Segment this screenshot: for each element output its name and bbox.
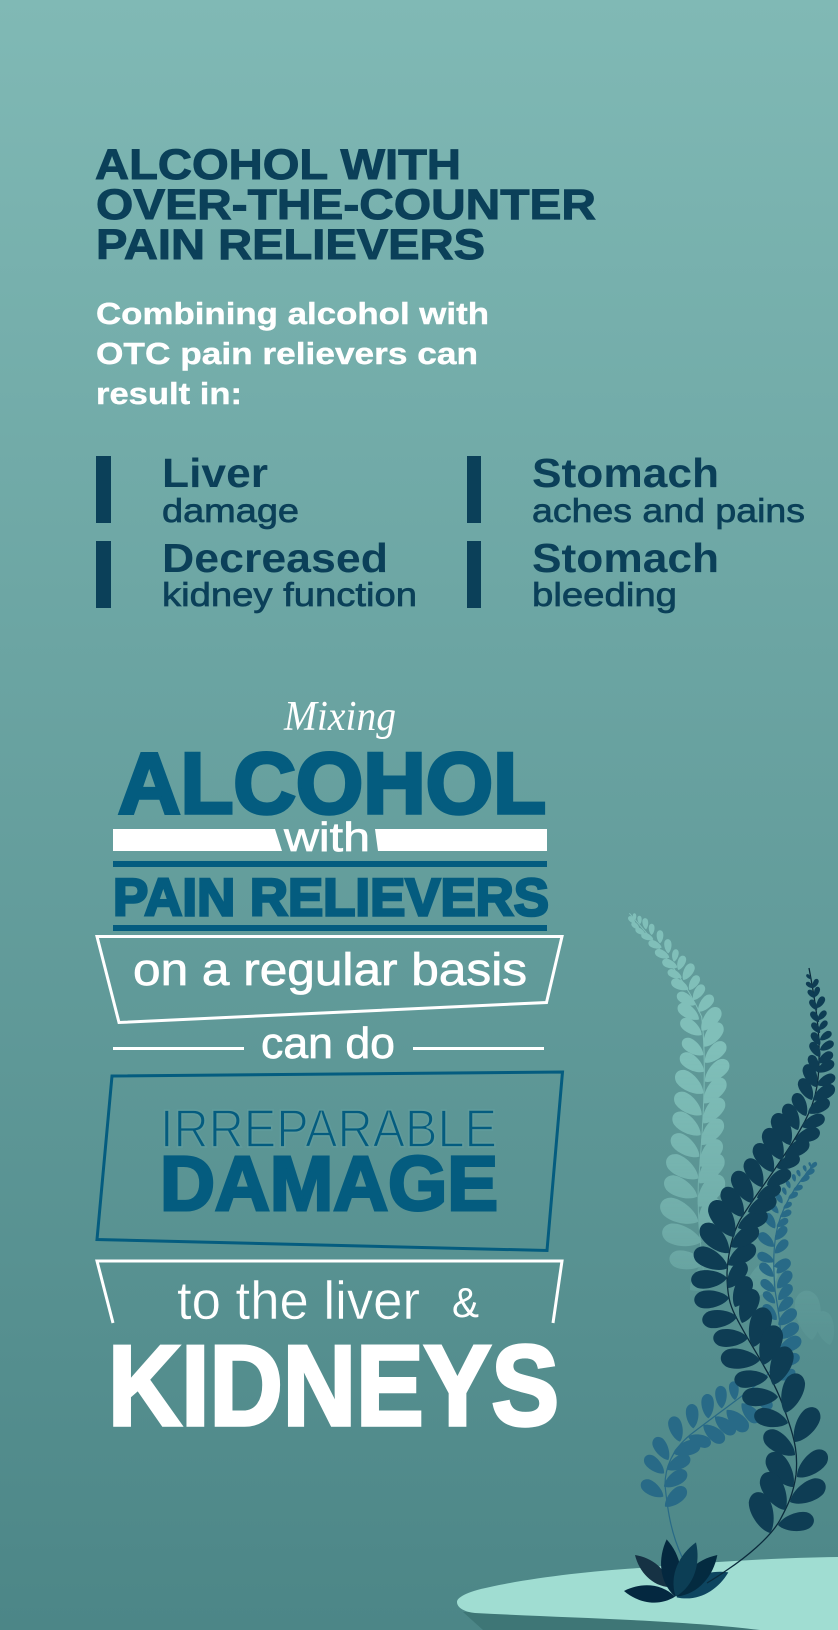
frame: to the liver & bbox=[97, 1261, 562, 1331]
word: ALCOHOL: ALCOHOL bbox=[118, 736, 546, 832]
line: can do: can do bbox=[261, 1019, 395, 1068]
effect: stomach aches and pains: aches and pains bbox=[532, 492, 805, 529]
plant: pale fern bbox=[628, 913, 814, 1294]
intro text: Combining alcohol with bbox=[96, 296, 489, 331]
intro text: result in: bbox=[96, 376, 242, 411]
frame: irreparable damage: IRREPARABLE bbox=[160, 1099, 497, 1159]
effect: stomach bleeding bbox=[467, 535, 719, 613]
frame: irreparable damage: DAMAGE bbox=[160, 1141, 498, 1227]
effect: decreased kidney function: Decreased bbox=[162, 535, 388, 581]
frame: irreparable damage bbox=[97, 1072, 562, 1250]
effect: stomach bleeding: bleeding bbox=[532, 576, 677, 613]
effect: stomach aches and pains bbox=[467, 450, 805, 529]
title: PAIN RELIEVERS bbox=[96, 221, 485, 269]
frame: to the liver &: & bbox=[452, 1279, 479, 1326]
effect: liver damage: damage bbox=[162, 492, 299, 529]
title bbox=[95, 141, 596, 269]
effect: stomach bleeding: Stomach bbox=[532, 535, 719, 581]
effect: decreased kidney function bbox=[96, 535, 417, 613]
intro text: OTC pain relievers can bbox=[96, 336, 478, 371]
word: Mixing: Mixing bbox=[283, 694, 396, 740]
line: can do bbox=[113, 1019, 544, 1068]
word: PAIN RELIEVERS with rules: PAIN RELIEVERS bbox=[113, 868, 549, 928]
intro text bbox=[96, 296, 489, 411]
effect: liver damage bbox=[96, 450, 299, 529]
effect: liver damage: Liver bbox=[162, 450, 268, 496]
banner: with bbox=[113, 814, 547, 860]
effect: decreased kidney function: kidney function bbox=[162, 576, 417, 613]
plant: rosette at base bbox=[623, 1538, 732, 1606]
frame: to the liver &: to the liver bbox=[177, 1271, 420, 1331]
ground shadow bbox=[463, 1610, 760, 1630]
effect: stomach aches and pains: Stomach bbox=[532, 450, 719, 496]
frame: on a regular basis bbox=[97, 936, 562, 1022]
title: OVER-THE-COUNTER bbox=[96, 181, 596, 229]
plant: dark fern bbox=[690, 968, 838, 1583]
plant: blue fern bbox=[638, 1161, 818, 1557]
banner: with: with bbox=[283, 814, 370, 860]
frame: on a regular basis: on a regular basis bbox=[133, 944, 527, 995]
title: ALCOHOL WITH bbox=[95, 141, 461, 189]
word: KIDNEYS: KIDNEYS bbox=[108, 1323, 559, 1450]
ground bbox=[457, 1557, 838, 1630]
